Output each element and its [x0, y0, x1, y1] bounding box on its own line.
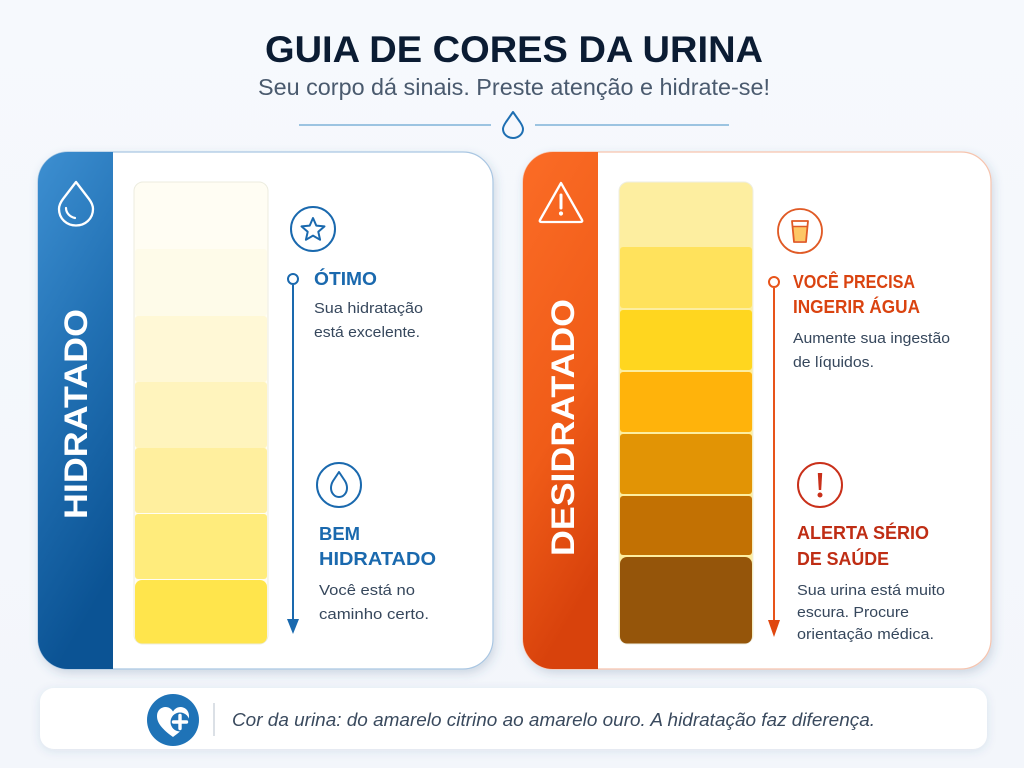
text: otimo: Sua hidratação — [314, 300, 423, 317]
icon: drop in circle — [317, 463, 361, 507]
icon: glass of water — [778, 209, 822, 253]
title: GUIA DE CORES DA URINA — [265, 29, 763, 70]
text: otimo: está excelente. — [314, 324, 420, 341]
footer text: Cor da urina: do amarelo citrino ao amarelo ouro. A hidratação faz diferença. — [232, 710, 875, 730]
text: bem hidratado: BEM — [319, 524, 360, 544]
arrow: hidratado scale — [287, 274, 299, 634]
icon: heart with plus — [147, 694, 199, 746]
text: alerta serio de saude — [797, 522, 945, 643]
icon: warning triangle — [540, 183, 582, 222]
arrow: desidratado scale — [768, 277, 780, 637]
sidebar label: HIDRATADO — [58, 309, 94, 519]
text: bem hidratado: caminho certo. — [319, 606, 429, 623]
text: otimo — [314, 268, 423, 341]
text: voce precisa ingerir agua — [793, 271, 950, 371]
color scale: desidratado — [619, 182, 753, 644]
color scale: hidratado — [134, 182, 268, 644]
icon: water drop — [59, 182, 93, 226]
sidebar label: DESIDRATADO — [545, 299, 581, 556]
header divider with water drop icon — [299, 112, 729, 138]
text: voce precisa ingerir agua: Aumente sua ingestão — [793, 330, 950, 347]
text: bem hidratado: Você está no — [319, 582, 415, 599]
panel: desidratado — [523, 152, 991, 669]
text: alerta serio de saude: DE SAÚDE — [797, 548, 889, 569]
text: voce precisa ingerir agua: de líquidos. — [793, 354, 874, 371]
sidebar: hidratado — [38, 152, 113, 669]
text: bem hidratado: HIDRATADO — [319, 549, 436, 569]
text: voce precisa ingerir agua: VOCÊ PRECISA — [793, 271, 915, 292]
text: alerta serio de saude: Sua urina está muito — [797, 582, 945, 599]
text: bem hidratado — [319, 524, 436, 623]
icon: star — [291, 207, 335, 251]
icon: exclamation in circle — [798, 463, 842, 507]
footer bar — [40, 688, 987, 749]
text: otimo: ÓTIMO — [314, 268, 377, 289]
text: alerta serio de saude: ALERTA SÉRIO — [797, 522, 929, 543]
text: voce precisa ingerir agua: INGERIR ÁGUA — [793, 296, 920, 317]
sidebar: desidratado — [523, 152, 598, 669]
text: alerta serio de saude: escura. Procure — [797, 604, 909, 621]
text: alerta serio de saude: orientação médica. — [797, 626, 934, 643]
panel: hidratado — [38, 152, 493, 669]
subtitle: Seu corpo dá sinais. Preste atenção e hidrate-se! — [258, 74, 770, 100]
